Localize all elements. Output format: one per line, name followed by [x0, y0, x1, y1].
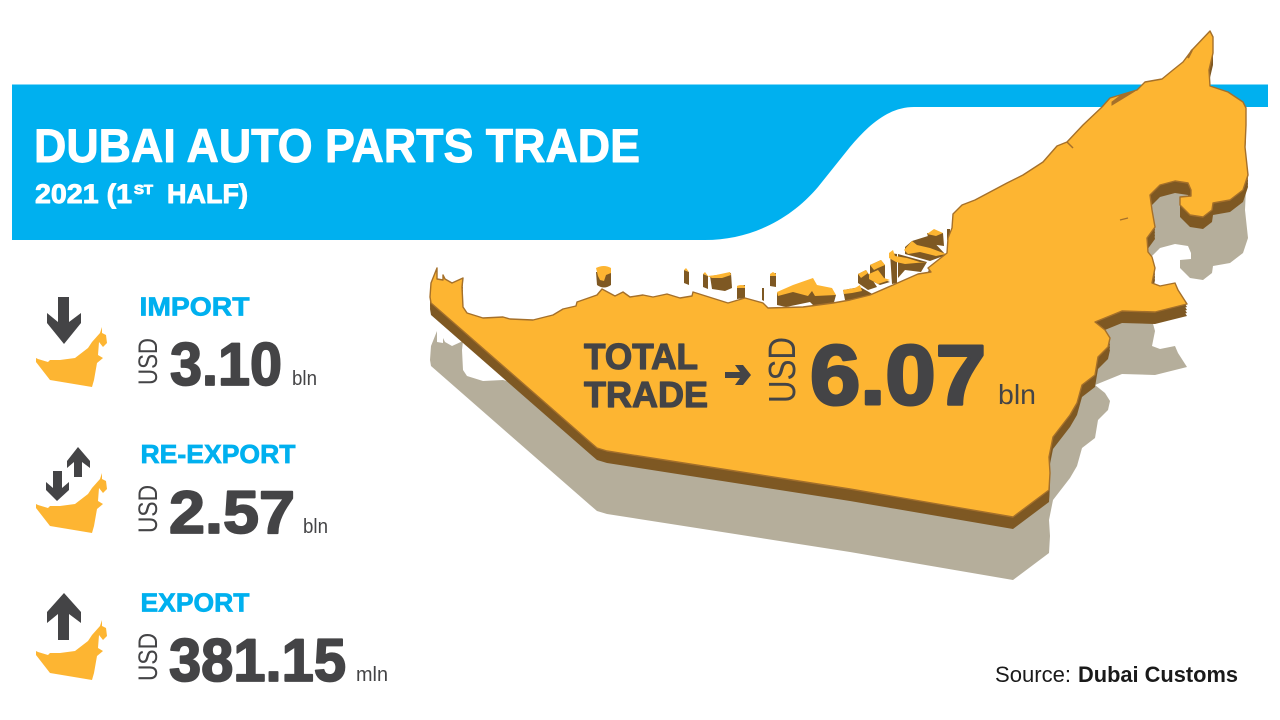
panel: import	[36, 292, 317, 398]
source: Dubai Customs	[1078, 662, 1238, 687]
subtitle: HALF)	[167, 179, 248, 209]
re-export value	[133, 479, 328, 546]
icon: up arrow	[67, 447, 90, 477]
import value: USD	[133, 338, 163, 385]
total trade value: 6.07	[810, 328, 986, 422]
total trade value	[762, 328, 1036, 422]
import value: bln	[292, 368, 317, 390]
title: DUBAI AUTO PARTS TRADE	[34, 119, 640, 172]
heading: re-export: RE-EXPORT	[140, 439, 296, 469]
map extrusion	[430, 34, 1248, 529]
heading: export: EXPORT	[140, 588, 250, 618]
icon: down arrow	[46, 471, 69, 501]
panel: re-export	[36, 439, 328, 546]
heading: import: IMPORT	[140, 292, 250, 322]
re-export value: bln	[303, 516, 328, 538]
subtitle: 2021 (1	[35, 179, 132, 209]
total trade label	[584, 336, 708, 415]
map of UAE	[430, 31, 1248, 580]
total trade label: TOTAL	[584, 336, 698, 377]
total trade value: USD	[762, 337, 804, 403]
total trade label: TRADE	[584, 374, 708, 415]
export value: USD	[133, 633, 163, 681]
import value: 3.10	[170, 331, 282, 398]
source	[995, 662, 1238, 687]
panel: export	[36, 588, 388, 694]
icon: import arrow	[47, 297, 81, 344]
title banner	[12, 84, 1268, 240]
import value	[133, 331, 317, 398]
arrow: total trade	[725, 365, 751, 385]
source: Source:	[995, 662, 1071, 687]
re-export value: USD	[133, 485, 163, 533]
total trade value: bln	[998, 379, 1036, 410]
map shadow	[430, 94, 1248, 580]
icon: import map	[36, 327, 107, 387]
islands	[596, 229, 950, 307]
export value: 381.15	[169, 627, 346, 694]
export value: mln	[356, 664, 388, 686]
subtitle: ST	[134, 182, 153, 197]
icon: re-export map	[36, 473, 107, 533]
re-export value: 2.57	[169, 479, 295, 546]
icon: export arrow	[47, 593, 81, 640]
icon: export map	[36, 620, 107, 680]
subtitle	[35, 179, 248, 209]
coast details	[1067, 50, 1192, 220]
map top surface	[430, 31, 1248, 517]
